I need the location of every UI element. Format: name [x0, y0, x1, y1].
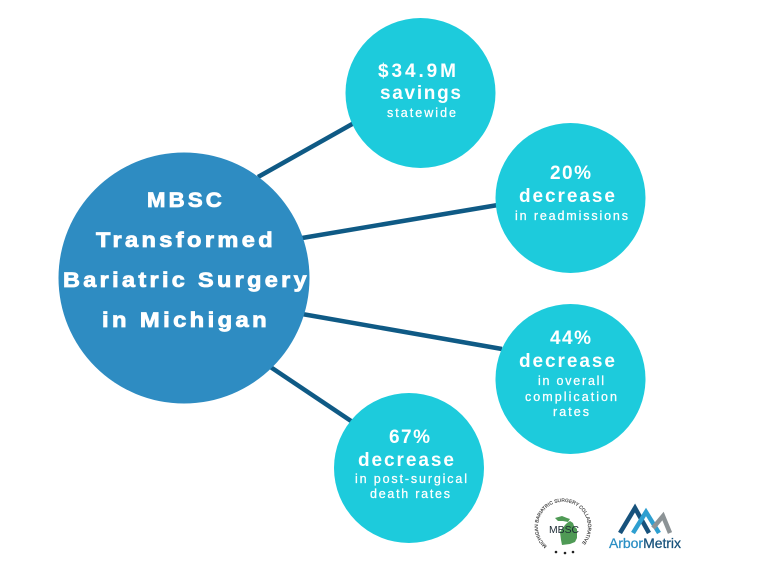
bubble: 44% decrease in overall complication rates: in overall	[538, 374, 604, 388]
bubble: $34.9M savings statewide	[346, 18, 496, 168]
bubble: 67% decrease in post-surgical death rates: death rates	[370, 487, 450, 501]
logo: ArborMetrix	[609, 508, 681, 551]
logo: Michigan Bariatric Surgery Collaborative seal: MBSC	[549, 524, 579, 536]
central circle: MBSC Transformed Bariatric Surgery in Michigan: Bariatric Surgery	[63, 269, 310, 292]
bubble: 67% decrease in post-surgical death rates: in post-surgical	[355, 472, 467, 486]
logo: Michigan Bariatric Surgery Collaborative seal: MICHIGAN BARIATRIC SURGERY COLLABORATIVE	[534, 498, 592, 548]
bubble: 44% decrease in overall complication rates: 44%	[550, 328, 591, 349]
central circle: MBSC Transformed Bariatric Surgery in Michigan: MBSC	[147, 189, 225, 212]
bubble: $34.9M savings statewide: savings	[380, 83, 461, 104]
central circle: MBSC Transformed Bariatric Surgery in Michigan: Transformed	[96, 229, 276, 252]
bubble: 20% decrease in readmissions: in readmissions	[515, 209, 628, 223]
central circle: MBSC Transformed Bariatric Surgery in Michigan: in Michigan	[102, 309, 270, 332]
bubble: 44% decrease in overall complication rates: decrease	[519, 351, 615, 372]
bubble: 67% decrease in post-surgical death rates	[334, 393, 484, 543]
bubble: 44% decrease in overall complication rates: complication	[525, 390, 617, 404]
bubble: 67% decrease in post-surgical death rates: decrease	[358, 450, 454, 471]
connector lines	[258, 123, 502, 423]
bubble: 20% decrease in readmissions: 20%	[550, 163, 591, 184]
bubble: 44% decrease in overall complication rates: rates	[553, 405, 589, 419]
bubble: 20% decrease in readmissions	[496, 123, 646, 273]
logo: ArborMetrix: ArborMetrix	[609, 535, 681, 551]
bubble: 67% decrease in post-surgical death rates: 67%	[389, 427, 430, 448]
central circle: MBSC Transformed Bariatric Surgery in Michigan	[58, 152, 310, 404]
bubble: $34.9M savings statewide: $34.9M	[378, 61, 456, 82]
bubble: $34.9M savings statewide: statewide	[387, 106, 456, 120]
bubble: 44% decrease in overall complication rates	[496, 304, 646, 454]
bubble: 20% decrease in readmissions: decrease	[519, 186, 615, 207]
